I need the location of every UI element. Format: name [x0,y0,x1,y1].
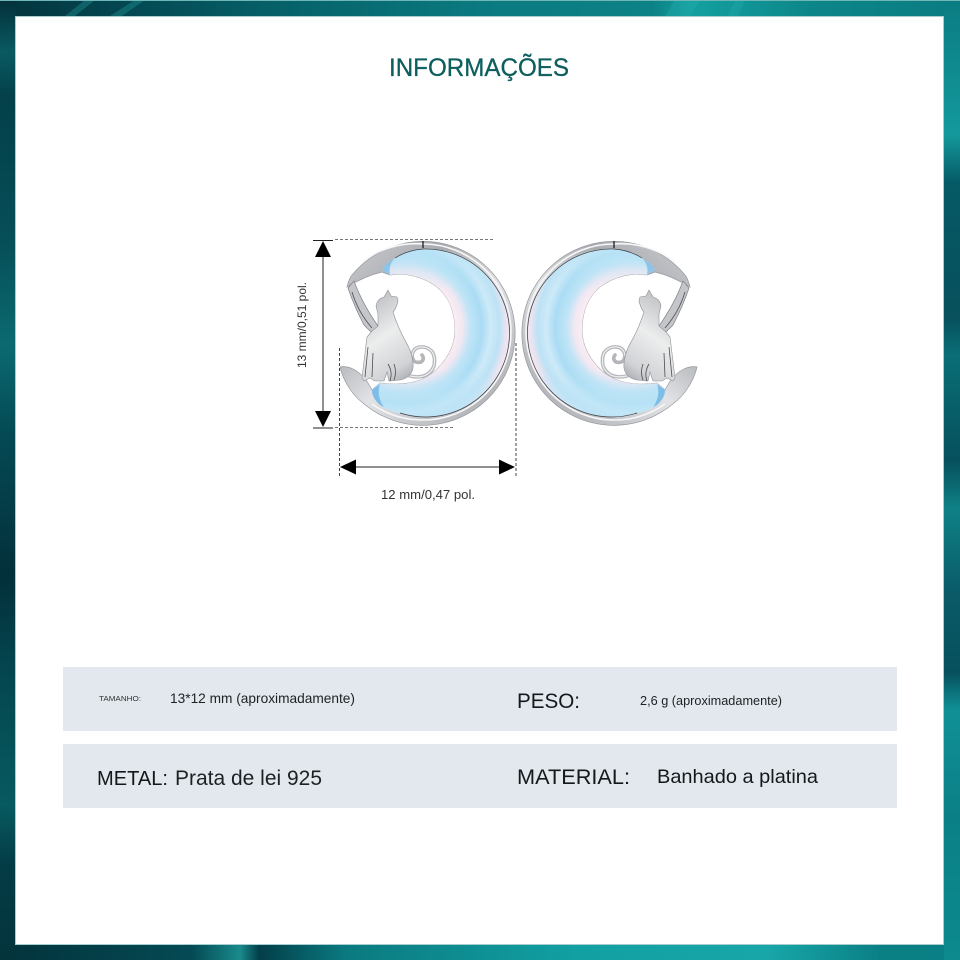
label: material: MATERIAL: [517,766,630,789]
height label: 13 mm/0,51 pol. [295,282,309,368]
product image: left moon cat earring [340,241,515,425]
label: weight: PESO: [517,690,580,713]
value: material: Banhado a platina [657,766,818,788]
label: size: TAMANHO: [99,694,141,703]
width dimension: arrow and guides [340,343,516,477]
title: INFORMAÇÕES [389,53,569,82]
value: metal: Prata de lei 925 [175,766,322,790]
spec row 2 [63,744,897,808]
spec row 1 [63,667,897,731]
height dimension: arrow and guides [313,240,495,428]
value: weight: 2,6 g (aproximadamente) [640,694,782,708]
product image: right moon cat earring [522,241,697,425]
label: metal: METAL: [97,768,168,790]
width label: 12 mm/0,47 pol. [381,487,475,502]
value: size: 13*12 mm (aproximadamente) [170,690,355,706]
